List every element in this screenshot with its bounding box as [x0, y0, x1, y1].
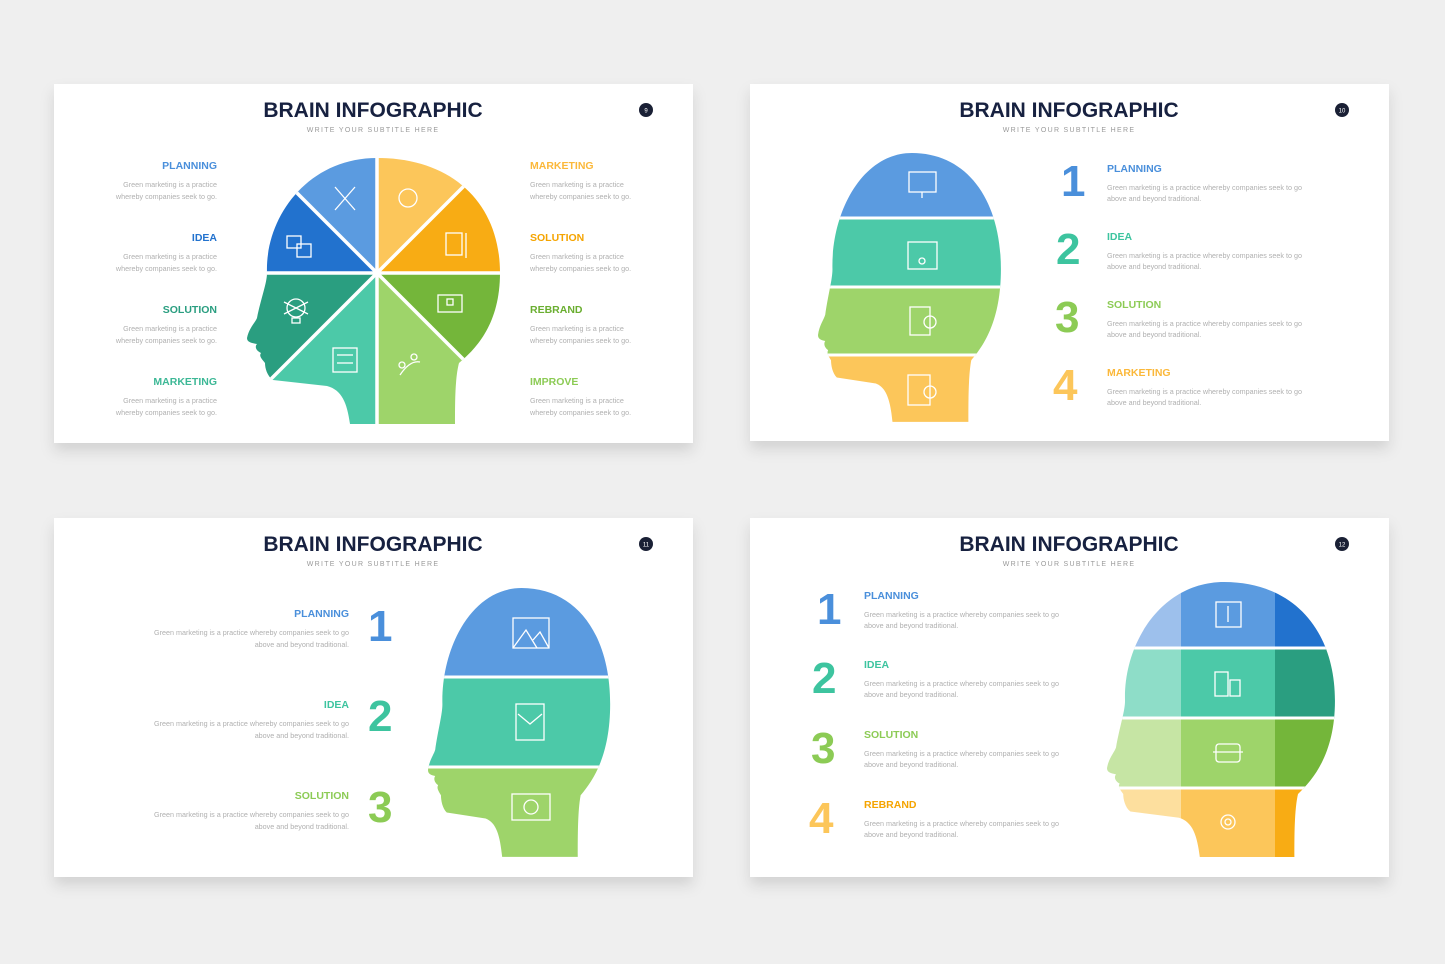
- numbered list: IDEA: [324, 699, 349, 711]
- banded head: [428, 588, 610, 857]
- numbered list: Green marketing is a practice whereby companies seek to go: [864, 749, 1059, 758]
- numbered list: 2: [812, 654, 836, 703]
- numbered list: REBRAND: [864, 799, 917, 811]
- title: BRAIN INFOGRAPHIC: [263, 99, 483, 122]
- numbered list: IDEA: [1107, 231, 1133, 243]
- numbered list: above and beyond traditional.: [864, 621, 958, 630]
- text right: MARKETING: [530, 160, 594, 172]
- text right: Green marketing is a practice: [530, 252, 624, 261]
- text left: Green marketing is a practice: [123, 180, 217, 189]
- text left: MARKETING: [153, 376, 217, 388]
- numbered list: above and beyond traditional.: [255, 640, 349, 649]
- numbered list: 2: [368, 692, 392, 741]
- text left: [115, 160, 217, 417]
- numbered list: SOLUTION: [295, 790, 349, 802]
- title: BRAIN INFOGRAPHIC: [959, 99, 1179, 122]
- numbered list: 3: [368, 783, 392, 832]
- numbered list: Green marketing is a practice whereby companies seek to go: [1107, 251, 1302, 260]
- numbered list: PLANNING: [294, 608, 349, 620]
- panel: bottom-left: [54, 518, 693, 877]
- text left: whereby companies seek to go.: [115, 408, 217, 417]
- numbered list: Green marketing is a practice whereby companies seek to go: [864, 610, 1059, 619]
- numbered list: above and beyond traditional.: [864, 830, 958, 839]
- text right: whereby companies seek to go.: [529, 408, 631, 417]
- text left: PLANNING: [162, 160, 217, 172]
- text left: Green marketing is a practice: [123, 252, 217, 261]
- numbered list: above and beyond traditional.: [1107, 398, 1201, 407]
- page number: 9: [644, 108, 648, 114]
- text right: REBRAND: [530, 304, 583, 316]
- page number: 11: [643, 542, 650, 548]
- numbered list: Green marketing is a practice whereby companies seek to go: [154, 810, 349, 819]
- numbered list: Green marketing is a practice whereby companies seek to go: [864, 679, 1059, 688]
- numbered list: 1: [1061, 157, 1085, 206]
- numbered list: above and beyond traditional.: [1107, 330, 1201, 339]
- banded head: [818, 153, 1001, 422]
- page number: [639, 537, 653, 551]
- numbered list: PLANNING: [864, 590, 919, 602]
- panel: top-left: [54, 84, 693, 446]
- subtitle: WRITE YOUR SUBTITLE HERE: [1003, 127, 1135, 134]
- numbered list: above and beyond traditional.: [255, 822, 349, 831]
- subtitle: WRITE YOUR SUBTITLE HERE: [307, 127, 439, 134]
- numbered list: IDEA: [864, 659, 890, 671]
- text right: SOLUTION: [530, 232, 584, 244]
- numbered list: above and beyond traditional.: [864, 760, 958, 769]
- icons: [1213, 602, 1243, 829]
- numbered list: above and beyond traditional.: [1107, 262, 1201, 271]
- numbered list: above and beyond traditional.: [255, 731, 349, 740]
- panel: bottom-right: [750, 518, 1389, 877]
- numbered list: [1053, 157, 1302, 410]
- text right: Green marketing is a practice: [530, 396, 624, 405]
- numbered list: Green marketing is a practice whereby companies seek to go: [154, 719, 349, 728]
- subtitle: WRITE YOUR SUBTITLE HERE: [307, 561, 439, 568]
- text left: whereby companies seek to go.: [115, 264, 217, 273]
- text left: Green marketing is a practice: [123, 324, 217, 333]
- text right: whereby companies seek to go.: [529, 192, 631, 201]
- numbered list: Green marketing is a practice whereby companies seek to go: [1107, 319, 1302, 328]
- icons: bands: [908, 172, 937, 405]
- numbered list: Green marketing is a practice whereby companies seek to go: [864, 819, 1059, 828]
- title: BRAIN INFOGRAPHIC: [263, 533, 483, 556]
- page number: 12: [1339, 542, 1346, 548]
- text left: whereby companies seek to go.: [115, 192, 217, 201]
- text left: whereby companies seek to go.: [115, 336, 217, 345]
- numbered list: PLANNING: [1107, 163, 1162, 175]
- numbered list: 4: [809, 794, 834, 843]
- numbered list: 1: [817, 585, 841, 634]
- text right: whereby companies seek to go.: [529, 264, 631, 273]
- text left: IDEA: [192, 232, 217, 244]
- pie head: [247, 158, 500, 424]
- text right: Green marketing is a practice: [530, 324, 624, 333]
- page number: [1335, 537, 1349, 551]
- text right: whereby companies seek to go.: [529, 336, 631, 345]
- numbered list: above and beyond traditional.: [1107, 194, 1201, 203]
- page number: [639, 103, 653, 117]
- text left: SOLUTION: [163, 304, 217, 316]
- numbered list: MARKETING: [1107, 367, 1171, 379]
- text right: Green marketing is a practice: [530, 180, 624, 189]
- numbered list: Green marketing is a practice whereby companies seek to go: [1107, 183, 1302, 192]
- numbered list: Green marketing is a practice whereby companies seek to go: [1107, 387, 1302, 396]
- numbered list: 1: [368, 602, 392, 651]
- title: BRAIN INFOGRAPHIC: [959, 533, 1179, 556]
- text left: Green marketing is a practice: [123, 396, 217, 405]
- numbered list: above and beyond traditional.: [864, 690, 958, 699]
- numbered list: 3: [811, 724, 835, 773]
- text right: [529, 160, 631, 417]
- numbered list: SOLUTION: [864, 729, 918, 741]
- grid head: [1107, 582, 1335, 857]
- numbered list: 3: [1055, 293, 1079, 342]
- numbered list: 2: [1056, 225, 1080, 274]
- panel: top-right: [750, 84, 1389, 441]
- numbered list: [154, 602, 392, 832]
- icons: [512, 618, 550, 820]
- numbered list: Green marketing is a practice whereby companies seek to go: [154, 628, 349, 637]
- page number: 10: [1339, 108, 1346, 114]
- numbered list: 4: [1053, 361, 1078, 410]
- numbered list: SOLUTION: [1107, 299, 1161, 311]
- subtitle: WRITE YOUR SUBTITLE HERE: [1003, 561, 1135, 568]
- icons: pie: [284, 187, 466, 375]
- text right: IMPROVE: [530, 376, 578, 388]
- page number: [1335, 103, 1349, 117]
- numbered list: [809, 585, 1059, 843]
